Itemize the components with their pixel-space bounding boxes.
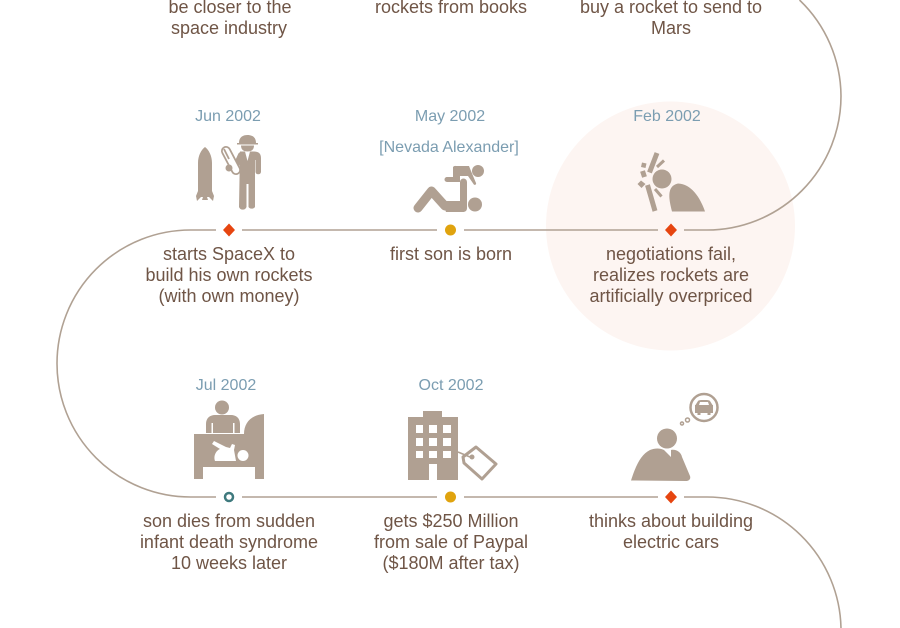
event: thinks about electric cars (631, 394, 718, 481)
event: Jun 2002 (195, 108, 261, 210)
text: thinks about building electric cars: electric cars (623, 532, 719, 552)
text: son dies: 10 weeks later (171, 553, 287, 573)
marker: Jun 2002 (223, 224, 235, 236)
icon: thinking person with car bubble (631, 394, 718, 481)
icon: building with price tag (408, 411, 496, 480)
text: buy a rocket to send to Mars: Mars (651, 18, 691, 38)
text: starts SpaceX: starts SpaceX to (163, 244, 295, 264)
icon: head banging on wall (638, 153, 705, 212)
event: Feb 2002 (633, 108, 705, 212)
date: Oct 2002 (419, 377, 484, 394)
text: gets $250 Million: gets $250 Million (383, 511, 519, 531)
date: May 2002 (415, 108, 485, 125)
text: starts SpaceX: (with own money) (158, 286, 300, 306)
date: Jun 2002 (195, 108, 261, 125)
text: gets $250 Million: ($180M after tax) (382, 553, 520, 573)
marker: Oct 2002 (445, 492, 456, 502)
icon: father lifting baby (418, 165, 484, 212)
marker: thinks about cars (665, 490, 677, 504)
event: Oct 2002 (408, 377, 496, 480)
text: negotiations fail: artificially overpriced (589, 286, 753, 306)
text: negotiations fail: realizes rockets are (593, 265, 749, 285)
marker: Feb 2002 (665, 224, 677, 236)
text: gets $250 Million: from sale of Paypal (374, 532, 528, 552)
marker: Jul 2002 (225, 493, 233, 501)
icon: rocket (196, 147, 214, 201)
icon: engineer with blueprint (224, 135, 261, 210)
text: starts SpaceX: build his own rockets (145, 265, 313, 285)
text: be closer to the space industry: space industry (171, 18, 287, 38)
event: Jul 2002 (194, 377, 264, 479)
text: negotiations fail: negotiations fail, (606, 244, 736, 264)
text: son dies: son dies from sudden (143, 511, 315, 531)
text: son dies: infant death syndrome (140, 532, 318, 552)
date: Feb 2002 (633, 108, 701, 125)
text: first son is born: first son is born (390, 244, 512, 264)
highlight circle (546, 102, 795, 350)
event: May 2002 (379, 108, 519, 212)
icon: parent at crib (194, 400, 264, 479)
date: Jul 2002 (196, 377, 256, 394)
text: thinks about building electric cars: thinks about building (589, 511, 753, 531)
marker: May 2002 (445, 224, 456, 236)
label: Nevada Alexander: [Nevada Alexander] (379, 139, 519, 156)
